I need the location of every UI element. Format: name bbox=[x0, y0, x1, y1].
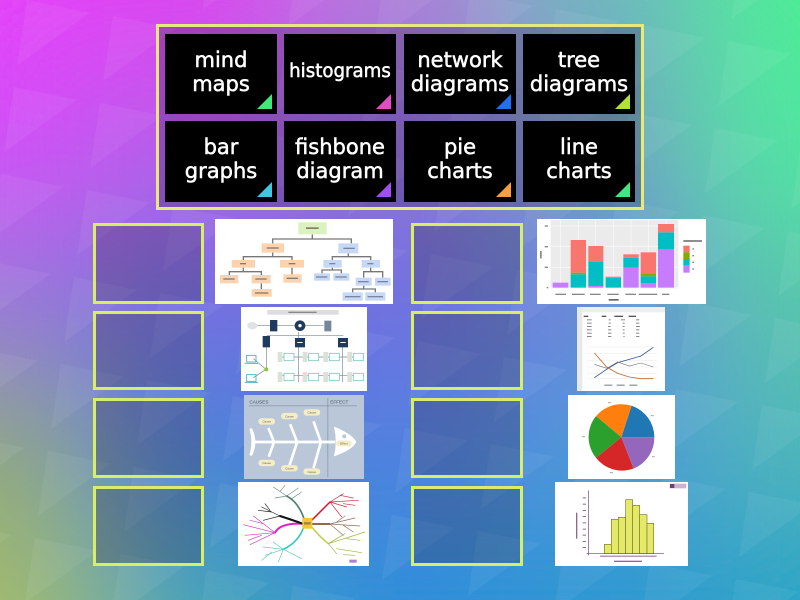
tile: bar graphs: bar bbox=[204, 134, 238, 158]
tile: line charts bbox=[523, 121, 635, 202]
tile: line charts: line bbox=[560, 134, 598, 158]
drop box: left row 3 bbox=[93, 398, 204, 478]
tile: pie charts bbox=[404, 121, 516, 202]
tile: mind maps: mind bbox=[195, 48, 247, 72]
tile: pie charts: pie bbox=[444, 134, 476, 158]
image: fishbone diagram: Effect bbox=[340, 442, 348, 446]
drop box: left row 1 bbox=[93, 223, 204, 304]
drop box: right row 4 bbox=[411, 486, 523, 566]
tile: line charts: charts bbox=[546, 158, 612, 182]
image: tree diagram bbox=[215, 219, 393, 304]
tile: tree diagrams bbox=[523, 34, 635, 114]
image: histogram bbox=[555, 482, 688, 566]
tile: bar graphs bbox=[165, 121, 277, 202]
tile: fishbone diagram: fishbone bbox=[295, 134, 385, 158]
tile: mind maps: maps bbox=[192, 72, 250, 96]
tile: histograms bbox=[284, 34, 396, 114]
image: network diagram bbox=[241, 307, 367, 391]
image: mind map bbox=[238, 482, 369, 566]
tile: network diagrams bbox=[404, 34, 516, 114]
image: pie chart bbox=[568, 395, 675, 479]
tile: tree diagrams: diagrams bbox=[530, 72, 628, 96]
image: fishbone diagram: Cause bbox=[262, 420, 271, 424]
drop box: left row 2 bbox=[93, 311, 204, 390]
image: fishbone diagram: Cause bbox=[308, 411, 317, 415]
tile: histograms: histograms bbox=[289, 61, 391, 82]
tile: bar graphs: graphs bbox=[185, 158, 257, 182]
image: stacked bar chart bbox=[537, 219, 706, 304]
image: fishbone diagram: EFFECT bbox=[330, 400, 349, 405]
image: fishbone diagram: Cause bbox=[285, 414, 294, 418]
tile: mind maps bbox=[165, 34, 277, 114]
image: line chart spreadsheet bbox=[577, 307, 665, 391]
image: fishbone diagram: CAUSES bbox=[249, 400, 269, 405]
tile: network diagrams: diagrams bbox=[411, 72, 509, 96]
drop box: right row 3 bbox=[411, 398, 523, 478]
tile: pie charts: charts bbox=[427, 158, 493, 182]
panel: answer tiles bbox=[156, 24, 644, 210]
tile: fishbone diagram: diagram bbox=[296, 158, 384, 182]
drop box: right row 1 bbox=[411, 223, 523, 304]
tile: network diagrams: network bbox=[417, 48, 503, 72]
drop box: right row 2 bbox=[411, 311, 523, 390]
tile: tree diagrams: tree bbox=[558, 48, 600, 72]
image: fishbone diagram: Cause bbox=[262, 461, 271, 465]
drop box: left row 4 bbox=[93, 486, 204, 566]
image: fishbone diagram bbox=[244, 395, 364, 479]
image: fishbone diagram: Cause bbox=[308, 470, 317, 474]
tile: fishbone diagram bbox=[284, 121, 396, 202]
image: fishbone diagram: Cause bbox=[285, 466, 294, 470]
